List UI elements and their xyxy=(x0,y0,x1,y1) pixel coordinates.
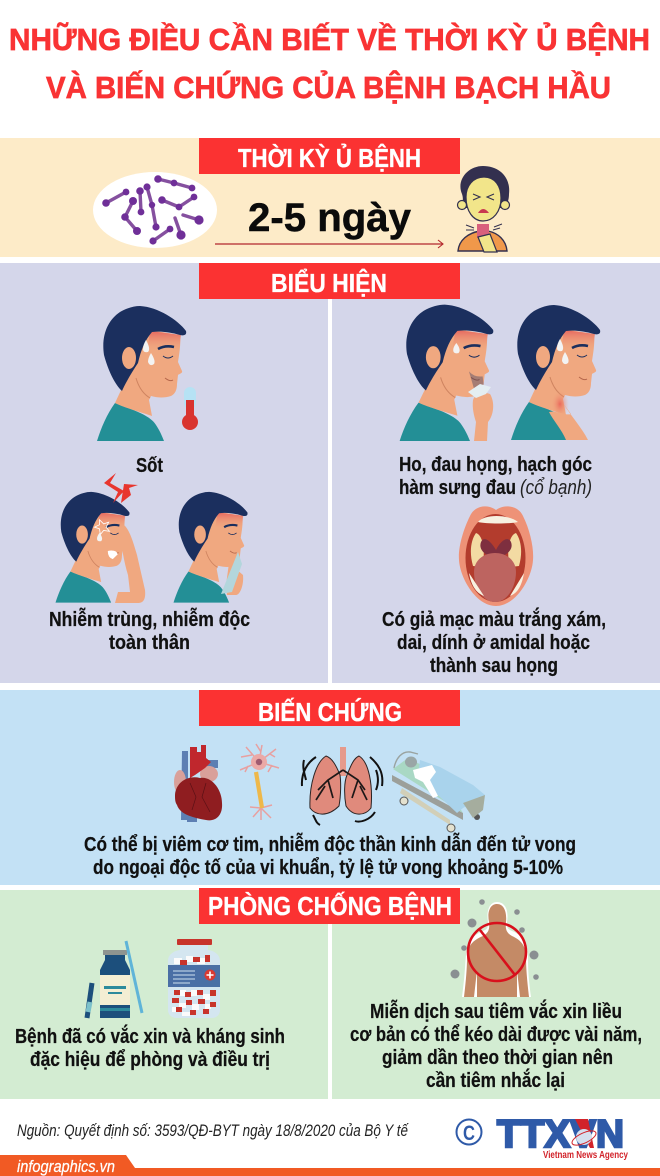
text: pseudomembrane xyxy=(382,607,606,677)
title: NHỮNG ĐIỀU CẦN BIẾT VỀ THỜI KỲ Ủ BỆNH xyxy=(9,21,650,57)
text: complications description: do ngoại độc tố của vi khuẩn, tỷ lệ tử vong khoảng 5-10% xyxy=(93,857,563,879)
icon: person coughing into tissue xyxy=(174,492,248,603)
icon: heart xyxy=(174,745,222,822)
text: infection, toxicity xyxy=(49,607,250,654)
heading: symptoms: BIỂU HIỆN xyxy=(271,268,387,298)
icon: hospital bed xyxy=(392,752,485,832)
text: fever: Sốt xyxy=(136,455,163,477)
text: immunity duration xyxy=(350,999,642,1092)
footer bar xyxy=(0,1155,660,1176)
arrow xyxy=(215,240,443,248)
text: vaccine and antibiotics: đặc hiệu để phòng và điều trị xyxy=(30,1049,270,1071)
icon: antibiotic pill jar xyxy=(168,939,220,1018)
icon: vaccine bottle and syringe xyxy=(87,941,142,1018)
logo: TTXVN: Vietnam News Agency xyxy=(543,1150,628,1161)
text: cough, sore throat xyxy=(399,454,592,499)
heading: incubation xyxy=(199,138,460,174)
text: pseudomembrane: Có giả mạc màu trắng xám, xyxy=(382,607,606,631)
text: vaccine and antibiotics xyxy=(15,1024,285,1071)
icon: lungs xyxy=(302,747,382,825)
panel: symptoms xyxy=(0,263,660,683)
panel: complications xyxy=(0,690,660,885)
heading: incubation: THỜI KỲ Ủ BỆNH xyxy=(238,142,421,173)
heading: complications: BIẾN CHỨNG xyxy=(258,697,402,727)
icon: coughing person xyxy=(400,305,493,441)
text: complications description xyxy=(84,832,576,879)
icon: sick person with sore throat xyxy=(458,166,510,252)
heading: complications xyxy=(199,690,460,727)
text: immunity duration: giảm dần theo thời gian nên xyxy=(382,1047,613,1069)
title xyxy=(9,21,650,105)
title: VÀ BIẾN CHỨNG CỦA BỆNH BẠCH HẦU xyxy=(46,69,611,105)
icon: fever with thermometer xyxy=(97,306,198,441)
heading: symptoms xyxy=(199,263,460,299)
panel: prevention xyxy=(0,888,660,1099)
panel: incubation period xyxy=(0,138,660,257)
text: infection, toxicity: Nhiễm trùng, nhiễm độc xyxy=(49,607,250,631)
icon: bacteria xyxy=(93,172,217,248)
source note: Nguồn: Quyết định số: 3593/QĐ-BYT ngày 18/8/2020 của Bộ Y tế xyxy=(17,1121,409,1140)
icon: open mouth with tonsils xyxy=(459,506,533,606)
text: cough, sore throat: hàm sưng đau xyxy=(399,477,516,499)
icon: copyright: C xyxy=(463,1122,475,1145)
icon: copyright xyxy=(456,1120,482,1145)
text: vaccine and antibiotics: Bệnh đã có vắc xin và kháng sinh xyxy=(15,1024,285,1048)
icon: body with prohibition sign xyxy=(450,899,539,997)
icon: person with sore neck xyxy=(511,305,600,440)
text: cough, sore throat: Ho, đau họng, hạch góc xyxy=(399,454,592,476)
text: infection, toxicity: toàn thân xyxy=(109,632,190,654)
text: pseudomembrane: dai, dính ở amidal hoặc xyxy=(397,632,590,654)
icon: person with headache xyxy=(56,473,145,603)
footer bar: infographics.vn xyxy=(17,1157,115,1176)
text: cough, sore throat: (cổ bạnh) xyxy=(520,477,592,499)
duration: 2-5 ngày xyxy=(248,196,412,240)
heading: prevention: PHÒNG CHỐNG BỆNH xyxy=(208,891,452,921)
text: pseudomembrane: thành sau họng xyxy=(430,655,558,677)
text: complications description: Có thể bị viêm cơ tim, nhiễm độc thần kinh dẫn đến tử vong xyxy=(84,832,576,856)
text: immunity duration: Miễn dịch sau tiêm vắc xin liều xyxy=(370,999,622,1023)
logo: TTXVN: TTXVN xyxy=(497,1113,624,1156)
icon: neuron xyxy=(240,744,279,820)
text: immunity duration: cần tiêm nhắc lại xyxy=(426,1068,565,1092)
